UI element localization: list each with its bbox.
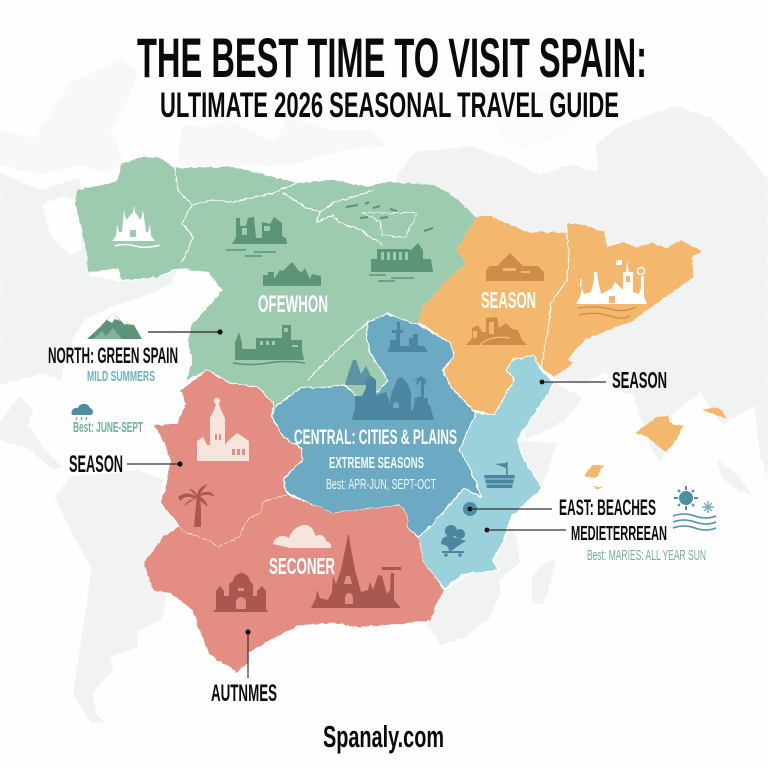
icon: sun and waves [673,486,716,530]
icon: blue palm skyline top [387,322,428,352]
region: east light blue [419,355,554,589]
east subheading: MEDIETERREEAN [571,523,667,545]
callout: north green spain [48,313,223,436]
spain regions map [75,157,701,672]
icon: small birds [346,202,433,231]
icon: catalonia church [576,260,647,318]
central subheading: EXTREME SEASONS [329,455,424,472]
region borders [175,168,569,380]
callout: south autumn label: AUTNMES [211,680,277,707]
icon: orange lodge [486,253,544,281]
region: north green spain [75,157,476,420]
footer website: Spanaly.com [323,719,444,754]
icon: skater [441,525,466,557]
icon: castle on water [226,217,287,256]
icon: boat [484,462,515,488]
icon: palace right [369,243,433,281]
callout: northeast season [540,367,667,393]
region: central blue [272,314,481,537]
region: southwest red [153,370,302,547]
icon: wedge temples [345,360,373,385]
region: catalonia orange [541,223,701,377]
central text [294,426,457,493]
icon: mosque [213,570,268,612]
icon: rain cloud [72,404,93,420]
orange label: SEASON [481,287,536,313]
central best months: Best: APR-JUN, SEPT-OCT [326,476,436,493]
callout: south autumn label [211,629,277,707]
central heading: CENTRAL: CITIES & PLAINS [294,426,457,449]
icon: cream cloud [273,525,331,548]
icon: palm tree [178,484,215,527]
north region label: OFEWHON [258,291,328,318]
north best months: Best: JUNE-SEPT [73,420,143,436]
north heading: NORTH: GREEN SPAIN [48,343,178,368]
balearic islands [585,407,726,489]
callout: east beaches [463,486,716,564]
north subheading: MILD SUMMERS [87,369,155,385]
east heading: EAST: BEACHES [559,495,656,520]
icon: tower skyline [311,535,401,608]
icon: palace lower [233,325,305,364]
icon: mountains [87,313,142,339]
icon: orange ruin [466,317,527,345]
icon: temple [263,262,321,286]
callout: west season: SEASON [69,451,123,478]
icon: central cityscape [352,376,434,420]
southern label: SECONER [269,553,335,579]
region: aragon orange [419,215,569,415]
callout: northeast season: SEASON [612,367,667,393]
region: south andalusia red [144,495,444,672]
icon: galicia cathedral [112,205,160,247]
icon: red church [197,398,249,461]
